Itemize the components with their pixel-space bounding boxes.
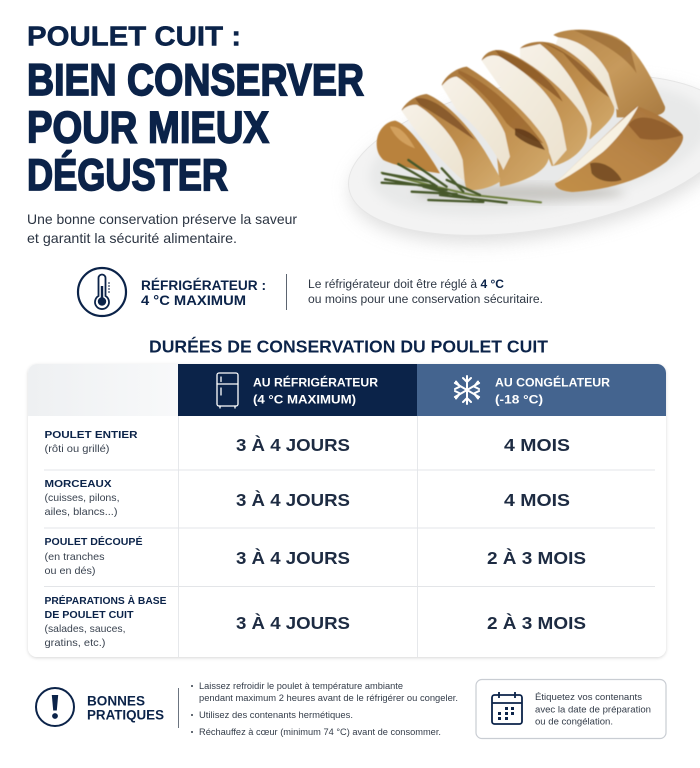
callout: fridge temperature: 4 °C MAXIMUM (141, 293, 246, 308)
icon: exclamation mark (36, 688, 74, 726)
title: POUR MIEUX (27, 104, 269, 152)
image: sliced chicken on a plate (336, 30, 700, 268)
back slice (553, 30, 665, 117)
row: poulet entier: (rôti ou grillé) (44, 443, 110, 455)
callout text: avec la date de préparation (535, 704, 651, 714)
row: poulet entier: POULET ENTIER (44, 429, 138, 441)
row: poulet découpé (44, 535, 586, 577)
row: poulet découpé: 2 À 3 MOIS (487, 547, 586, 568)
row: poulet entier (44, 429, 570, 455)
row: poulet découpé: 3 À 4 JOURS (236, 547, 350, 568)
row: préparations: PRÉPARATIONS À BASE (44, 594, 166, 607)
column header: freezer: (-18 °C) (495, 392, 543, 406)
icon: snowflake (455, 376, 479, 404)
callout: fridge temperature: RÉFRIGÉRATEUR : (141, 278, 266, 293)
row: préparations (44, 594, 586, 649)
icon: calendar (492, 692, 522, 724)
row: morceaux: ailes, blancs...) (44, 506, 118, 518)
title: BIEN CONSERVER (27, 56, 364, 105)
row: poulet découpé: (en tranches (44, 551, 104, 563)
row: morceaux: 4 MOIS (504, 490, 570, 510)
callout: fridge temperature: ou moins pour une conservation sécuritaire. (308, 294, 543, 306)
column header: freezer: AU CONGÉLATEUR (495, 374, 610, 390)
column header: fridge: (4 °C MAXIMUM) (253, 392, 356, 406)
list: best practices (191, 681, 458, 737)
row: morceaux: MORCEAUX (44, 478, 112, 490)
callout: fridge temperature: Le réfrigérateur doit être réglé à 4 °C (308, 279, 504, 291)
list: best practices: pendant maximum 2 heures avant de le réfrigérer ou congeler. (199, 693, 458, 703)
row: poulet découpé: ou en dés) (44, 565, 96, 577)
subtitle: et garantit la sécurité alimentaire. (27, 230, 237, 246)
callout text: Étiquetez vos contenants (535, 692, 643, 702)
panel: storage table (28, 364, 666, 657)
heading: bonnes pratiques: PRATIQUES (87, 708, 164, 722)
column header: fridge (253, 374, 378, 406)
slice 3 (482, 50, 587, 166)
column header: freezer (495, 374, 610, 406)
row: poulet entier: 3 À 4 JOURS (236, 434, 350, 455)
heading: bonnes pratiques: BONNES (87, 694, 145, 708)
row: poulet entier: 4 MOIS (504, 435, 570, 455)
row: morceaux (44, 478, 570, 518)
row: morceaux: (cuisses, pilons, (44, 492, 120, 504)
row: préparations: (salades, sauces, (44, 623, 126, 635)
callout: label containers (476, 680, 666, 738)
icon: thermometer (78, 268, 126, 316)
rosemary sprig (382, 160, 541, 203)
heading: table title: DURÉES DE CONSERVATION DU POULET CUIT (149, 336, 548, 356)
front piece (555, 106, 683, 192)
slice 2 (520, 42, 614, 139)
callout text (535, 692, 651, 726)
row: préparations: gratins, etc.) (44, 637, 106, 649)
heading: bonnes pratiques (87, 694, 164, 722)
end slice (377, 121, 440, 173)
list: best practices: Réchauffez à cœur (minimum 74 °C) avant de consommer. (199, 727, 441, 737)
subtitle: Une bonne conservation préserve la saveur (27, 211, 297, 227)
callout: fridge temperature (141, 274, 543, 310)
callout text: ou de congélation. (535, 716, 613, 726)
title: DÉGUSTER (27, 150, 228, 200)
column header: fridge: AU RÉFRIGÉRATEUR (253, 374, 378, 390)
row: préparations: 3 À 4 JOURS (236, 612, 350, 633)
slice 4 (442, 67, 549, 187)
title (27, 20, 364, 200)
list: best practices: Laissez refroidir le poulet à température ambiante (199, 681, 403, 691)
row: morceaux: 3 À 4 JOURS (236, 489, 350, 510)
row: préparations: DE POULET CUIT (44, 609, 134, 621)
list: best practices: Utilisez des contenants hermétiques. (199, 710, 353, 720)
subtitle (27, 211, 297, 246)
slice 5 (402, 94, 500, 191)
row: préparations: 2 À 3 MOIS (487, 612, 586, 633)
row: poulet découpé: POULET DÉCOUPÉ (44, 535, 142, 548)
icon: fridge (217, 373, 238, 408)
title: POULET CUIT : (27, 20, 241, 52)
